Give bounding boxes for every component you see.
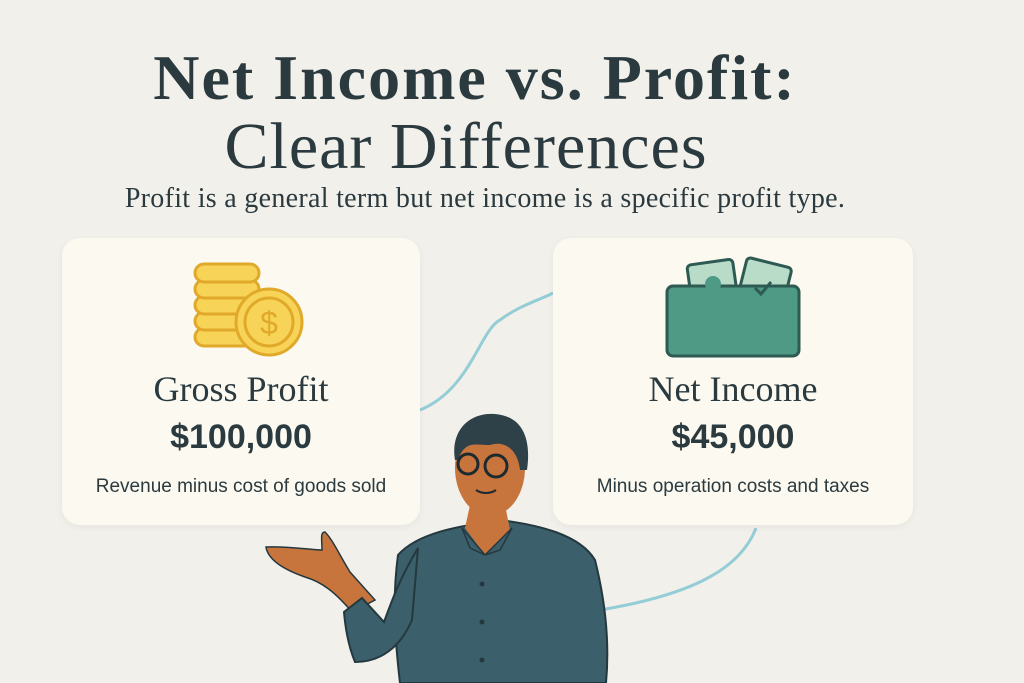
icon: wallet bbox=[666, 256, 800, 358]
panel: net income bbox=[553, 238, 913, 525]
head bbox=[455, 420, 525, 516]
title: Clear Differences bbox=[224, 110, 708, 183]
heading: Net Income bbox=[649, 369, 817, 409]
arm sleeve bbox=[344, 548, 418, 662]
neck bbox=[465, 505, 510, 555]
body bbox=[395, 520, 607, 683]
subtitle: Profit is a general term but net income is a specific profit type. bbox=[125, 183, 845, 214]
heading: Gross Profit bbox=[153, 369, 328, 409]
icon: coins bbox=[194, 262, 304, 356]
buttons bbox=[480, 582, 484, 586]
title: Net Income vs. Profit: bbox=[153, 42, 797, 113]
description: Revenue minus cost of goods sold bbox=[96, 476, 386, 497]
panel: gross profit bbox=[62, 238, 420, 525]
value: $100,000 bbox=[170, 418, 312, 456]
description: Minus operation costs and taxes bbox=[597, 476, 869, 497]
icon: coins: $ bbox=[260, 305, 278, 341]
hand bbox=[266, 532, 375, 612]
title bbox=[153, 42, 797, 183]
value: $45,000 bbox=[672, 418, 794, 456]
